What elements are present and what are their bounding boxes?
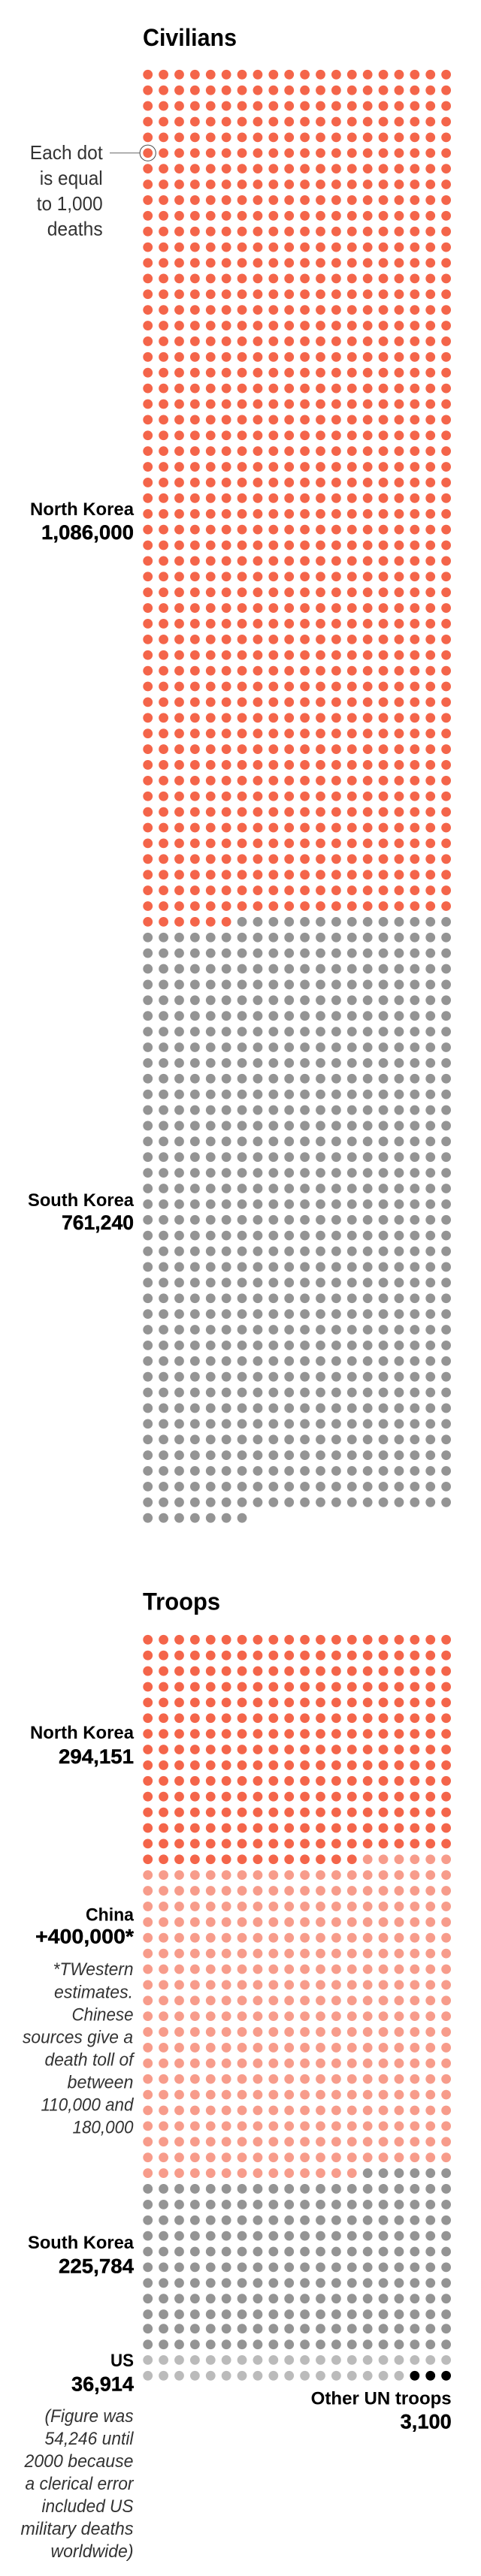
label: North Korea troops: North Korea xyxy=(30,1723,135,1743)
label: China troops xyxy=(35,1905,135,1948)
note: Chinese estimates: *TWestern xyxy=(53,1959,134,1980)
note: Chinese estimates: sources give a xyxy=(23,2028,133,2048)
heading: Civilians: Civilians xyxy=(143,24,237,51)
label: South Korea civilians xyxy=(28,1190,135,1234)
label: South Korea troops xyxy=(28,2233,135,2278)
dot grid: North Korea civilians xyxy=(148,74,446,922)
dot grid: China troops xyxy=(148,1860,446,2173)
label: other UN troops: 3,100 xyxy=(401,2410,452,2433)
dot grid: US troops xyxy=(148,2360,446,2375)
dot grid: South Korea civilians xyxy=(148,922,446,1518)
note: Chinese estimates: 110,000 and xyxy=(41,2095,134,2116)
callout ring around dot xyxy=(140,145,156,161)
note: Chinese estimates: estimates. xyxy=(54,1983,133,2003)
note: US figure correction xyxy=(21,2406,134,2562)
panel: troops xyxy=(21,1588,452,2562)
label: other UN troops: Other UN troops xyxy=(311,2389,452,2409)
note: US figure correction: 54,246 until xyxy=(45,2429,134,2449)
note: Chinese estimates xyxy=(23,1959,135,2138)
note: US figure correction: included US xyxy=(42,2496,134,2517)
note: Chinese estimates: death toll of xyxy=(45,2050,135,2070)
label: other UN troops xyxy=(311,2389,452,2433)
note: US figure correction: (Figure was xyxy=(45,2406,134,2427)
label: US troops: 36,914 xyxy=(71,2372,134,2395)
label: South Korea troops: 225,784 xyxy=(59,2255,134,2278)
callout text: Each dot xyxy=(30,141,103,164)
label: North Korea troops: 294,151 xyxy=(59,1745,134,1768)
note: US figure correction: worldwide) xyxy=(51,2541,134,2562)
callout text xyxy=(30,141,103,240)
dot grid: South Korea troops xyxy=(148,2173,446,2345)
note: Chinese estimates: between xyxy=(68,2073,134,2093)
note: US figure correction: a clerical error xyxy=(26,2474,134,2494)
label: US troops xyxy=(71,2351,134,2395)
label: South Korea civilians: South Korea xyxy=(28,1190,135,1211)
dot grid: other UN troops xyxy=(415,2371,446,2381)
note: US figure correction: military deaths xyxy=(21,2519,134,2539)
label: North Korea civilians: 1,086,000 xyxy=(41,521,134,544)
callout text: to 1,000 xyxy=(37,192,103,215)
label: US troops: US xyxy=(110,2351,134,2371)
heading: Troops: Troops xyxy=(143,1588,220,1615)
label: North Korea civilians: North Korea xyxy=(30,499,135,520)
label: South Korea civilians: 761,240 xyxy=(62,1211,134,1234)
note: Chinese estimates: 180,000 xyxy=(72,2118,134,2138)
callout: each dot is equal to 1,000 deaths xyxy=(30,141,156,240)
note: US figure correction: 2000 because xyxy=(24,2451,134,2472)
label: North Korea troops xyxy=(30,1723,135,1768)
label: North Korea civilians xyxy=(30,499,135,544)
callout text: is equal xyxy=(40,167,103,189)
panel: civilians xyxy=(28,24,446,1518)
label: China troops: China xyxy=(86,1905,135,1926)
label: South Korea troops: South Korea xyxy=(28,2233,135,2253)
callout leader line xyxy=(110,152,140,154)
callout text: deaths xyxy=(47,217,103,240)
note: Chinese estimates: Chinese xyxy=(72,2005,134,2026)
dot grid: North Korea troops xyxy=(148,1639,446,1860)
label: China troops: +400,000* xyxy=(35,1926,135,1948)
